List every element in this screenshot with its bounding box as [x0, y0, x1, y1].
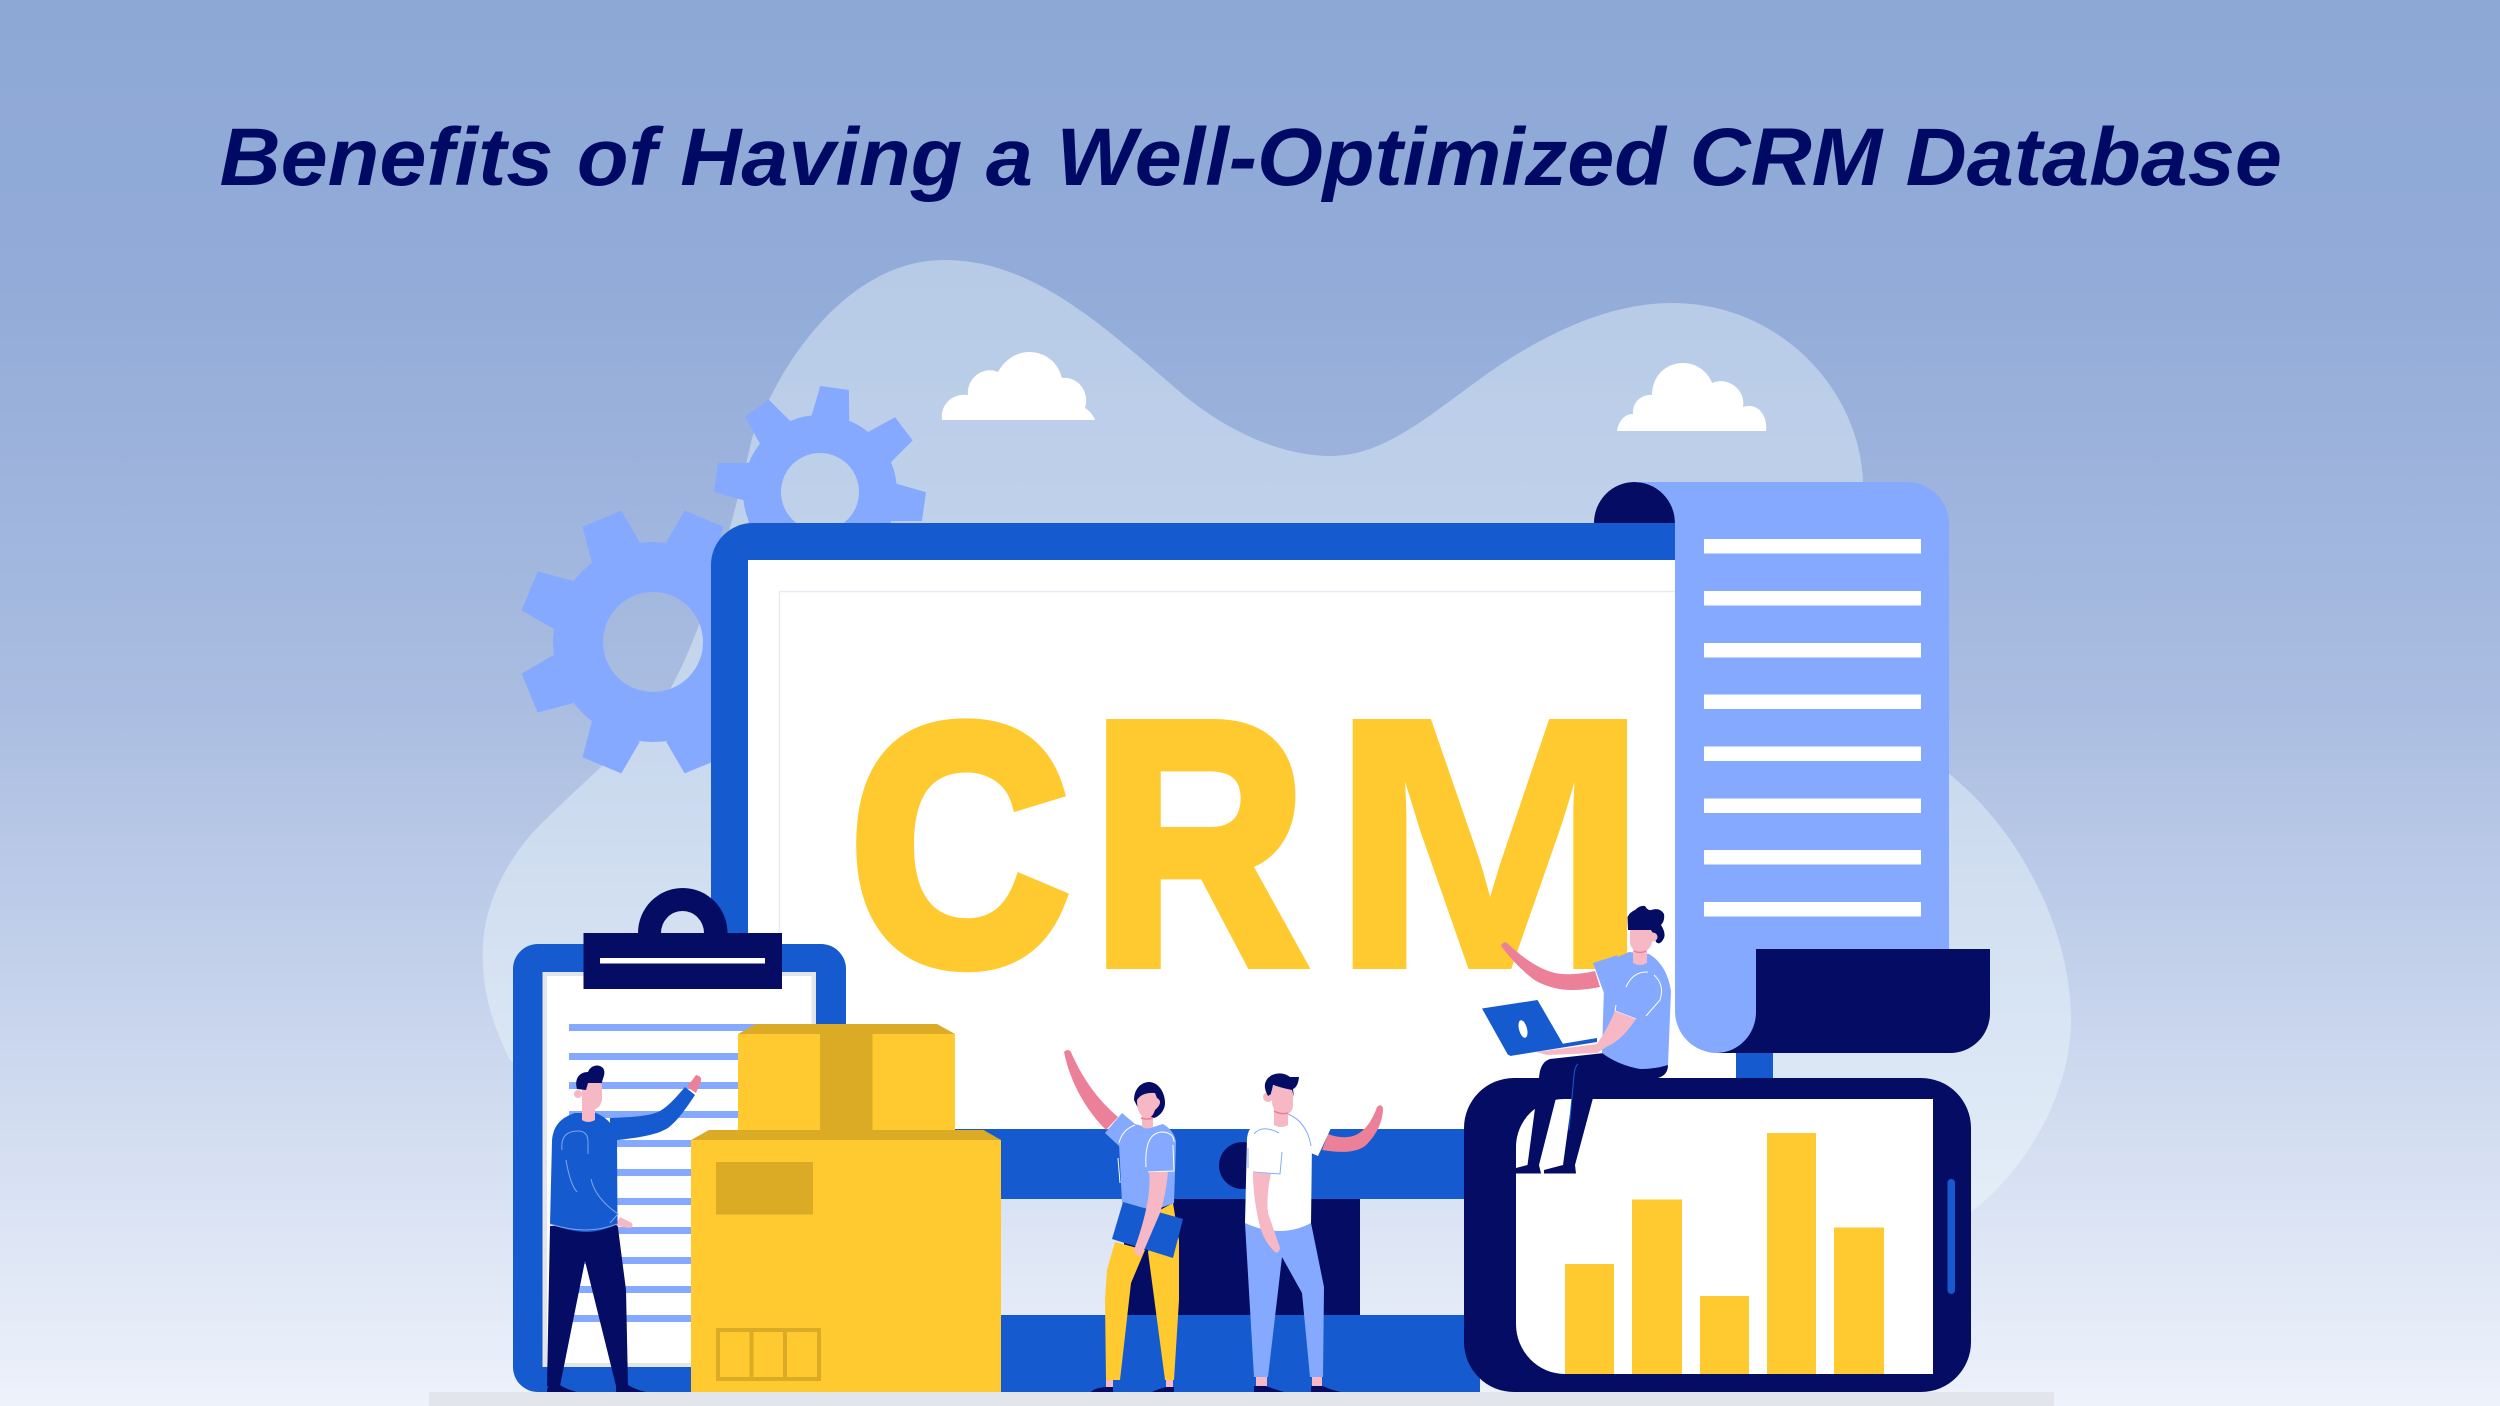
head: [1633, 948, 1647, 965]
tablet with bar chart: [1464, 1078, 1971, 1392]
monitor centre dot: [1219, 1142, 1266, 1189]
head: [1142, 1115, 1153, 1128]
legs: [1516, 1053, 1668, 1174]
icon: right cloud: [1617, 363, 1766, 431]
CRM heading on screen: C: [851, 657, 1068, 1033]
forearm: [1536, 1011, 1636, 1055]
scroll text lines: [1704, 539, 1921, 916]
floor: [429, 1392, 2054, 1406]
person: man on tablet with laptop: [1482, 906, 1671, 1174]
torso: [1593, 955, 1618, 993]
person: woman with folder: [1064, 1050, 1183, 1392]
legs: [1256, 1377, 1322, 1388]
raised arm: [1501, 942, 1600, 990]
document scroll: [1594, 482, 1990, 1053]
CRM heading on screen: M: [1329, 643, 1651, 1043]
bar chart: [1565, 1133, 1884, 1374]
box grid mark: [718, 1330, 819, 1379]
torso: [1245, 1115, 1312, 1231]
person: man at clipboard: [547, 1065, 701, 1392]
forearm: [1253, 1172, 1280, 1252]
upper box: [738, 1024, 955, 1140]
head: [1274, 1108, 1288, 1127]
clipboard lines: [569, 1024, 759, 1322]
CRM heading on screen: R: [1092, 651, 1306, 1035]
monitor: [711, 523, 1773, 1392]
raised arm: [1064, 1050, 1118, 1130]
person: man in white shirt: [1245, 1073, 1383, 1392]
monitor stand base: [1000, 1315, 1480, 1392]
raised arm: [1322, 1105, 1383, 1152]
clipboard: [513, 888, 846, 1392]
tablet button: [1948, 1179, 1955, 1294]
CRM heading on screen: [851, 643, 1651, 1043]
folder: [1112, 1202, 1183, 1258]
monitor stand neck: [1124, 1199, 1360, 1315]
forearm: [1134, 1172, 1168, 1256]
icon: small gear: [713, 385, 927, 599]
clipboard clip: [584, 888, 782, 989]
title: Benefits of Having a Well-Optimized CRM Database: [220, 111, 2282, 203]
lower box: [691, 1130, 1001, 1140]
icon: left cloud: [942, 352, 1095, 420]
torso: [1105, 1113, 1135, 1146]
legs: [1106, 1380, 1173, 1388]
laptop: [1482, 1000, 1563, 1055]
background blob: [483, 260, 2071, 1220]
cardboard boxes: [691, 1024, 1001, 1392]
icon: large gear: [520, 509, 786, 775]
